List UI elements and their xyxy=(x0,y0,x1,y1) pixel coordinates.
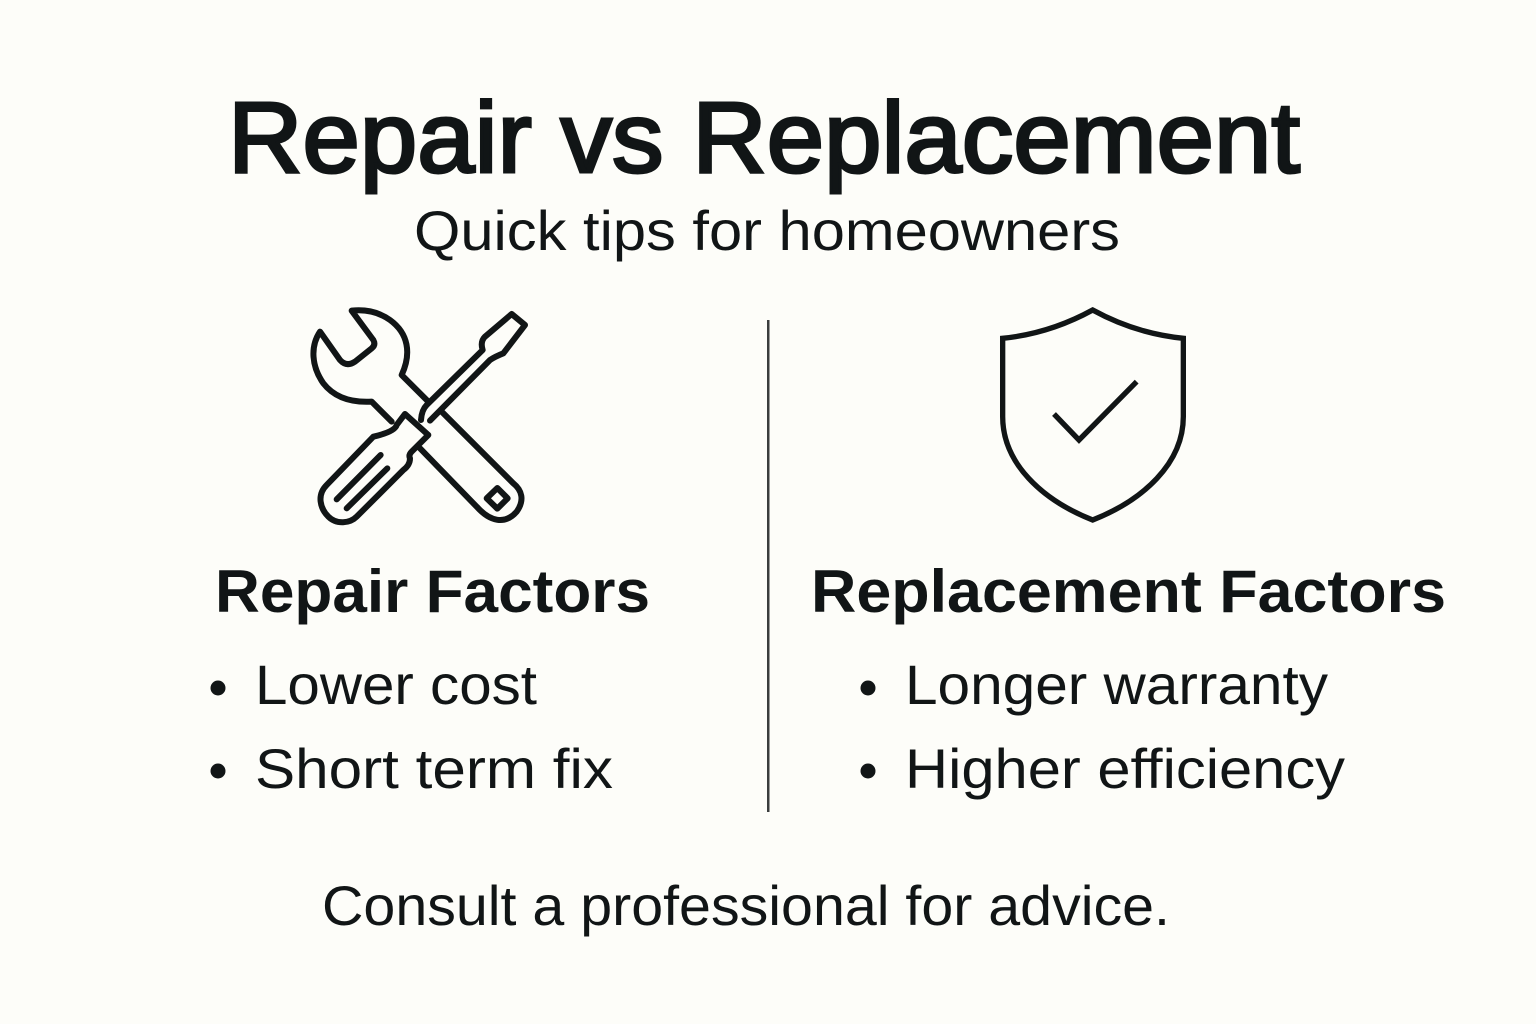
subtitle: Quick tips for homeowners xyxy=(414,199,1120,262)
list item: higher efficiency: Higher efficiency xyxy=(905,737,1345,800)
icon: crossed wrench and screwdriver xyxy=(313,310,525,522)
list item: lower cost: Lower cost xyxy=(255,653,537,716)
center divider xyxy=(767,320,770,812)
list item: longer warranty: Longer warranty xyxy=(905,653,1328,716)
heading: replacement factors: Replacement Factors xyxy=(811,558,1446,625)
panel: replacement factors xyxy=(811,558,1446,800)
title: Repair vs Replacement xyxy=(228,82,1300,194)
icon: shield with check xyxy=(1003,310,1183,520)
list item: short term fix: Short term fix xyxy=(255,737,613,800)
panel: repair factors xyxy=(210,558,650,800)
footer note: Consult a professional for advice. xyxy=(322,874,1170,937)
heading: repair factors: Repair Factors xyxy=(215,558,650,625)
